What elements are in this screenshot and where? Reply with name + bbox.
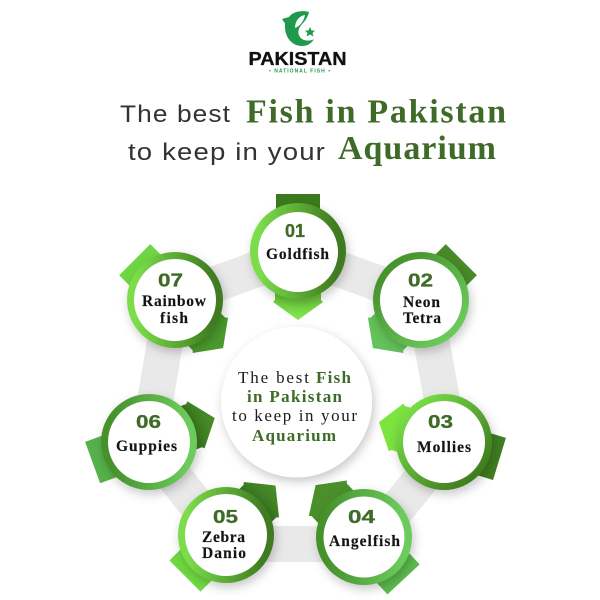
title — [120, 94, 506, 167]
hub circle: in Pakistan — [247, 387, 343, 406]
logo wordmark: PAKISTAN — [248, 49, 346, 69]
title: Fish in Pakistan — [246, 94, 506, 130]
step 06: Guppies: 06 — [136, 411, 161, 432]
step 07: Rainbow fish: fish — [160, 310, 188, 327]
title: The best — [120, 101, 231, 128]
step 03: Mollies — [372, 394, 507, 490]
hub circle: Fish — [316, 368, 352, 387]
hub circle: to keep in your — [232, 406, 357, 425]
hub circle — [221, 326, 372, 478]
step 02: Neon Tetra: Neon — [403, 294, 440, 311]
step 02: Neon Tetra: 02 — [408, 270, 433, 290]
step 05: Zebra Danio: Danio — [202, 545, 246, 562]
step 06: Guppies — [84, 394, 223, 490]
hub circle: Aquarium — [252, 426, 336, 445]
step 05: Zebra Danio: 05 — [213, 506, 238, 527]
step 02: Neon Tetra: Tetra — [403, 310, 441, 327]
step 02: Neon Tetra — [355, 242, 479, 366]
step 01: Goldfish: Goldfish — [266, 246, 329, 263]
step 04: Angelfish: Angelfish — [329, 533, 400, 550]
hub circle: The best — [238, 368, 309, 387]
step 06: Guppies: Guppies — [116, 438, 177, 455]
step 03: Mollies: Mollies — [417, 439, 471, 456]
grey heptagon ring — [148, 254, 450, 544]
step 01: Goldfish — [250, 194, 346, 320]
step 07: Rainbow fish: 07 — [158, 270, 183, 290]
step 01: Goldfish: 01 — [285, 220, 305, 241]
title: Aquarium — [338, 130, 496, 167]
step 04: Angelfish — [297, 467, 423, 597]
step 07: Rainbow fish — [117, 242, 241, 366]
logo — [248, 11, 346, 74]
title: to keep in your — [128, 139, 326, 166]
logo tagline: • NATIONAL FISH • — [269, 68, 330, 74]
step 05: Zebra Danio: Zebra — [202, 529, 245, 546]
icon: fish crescent — [282, 11, 315, 46]
step 03: Mollies: 03 — [428, 411, 453, 432]
step 05: Zebra Danio — [167, 468, 293, 594]
step 04: Angelfish: 04 — [348, 506, 376, 527]
step 07: Rainbow fish: Rainbow — [142, 293, 207, 310]
